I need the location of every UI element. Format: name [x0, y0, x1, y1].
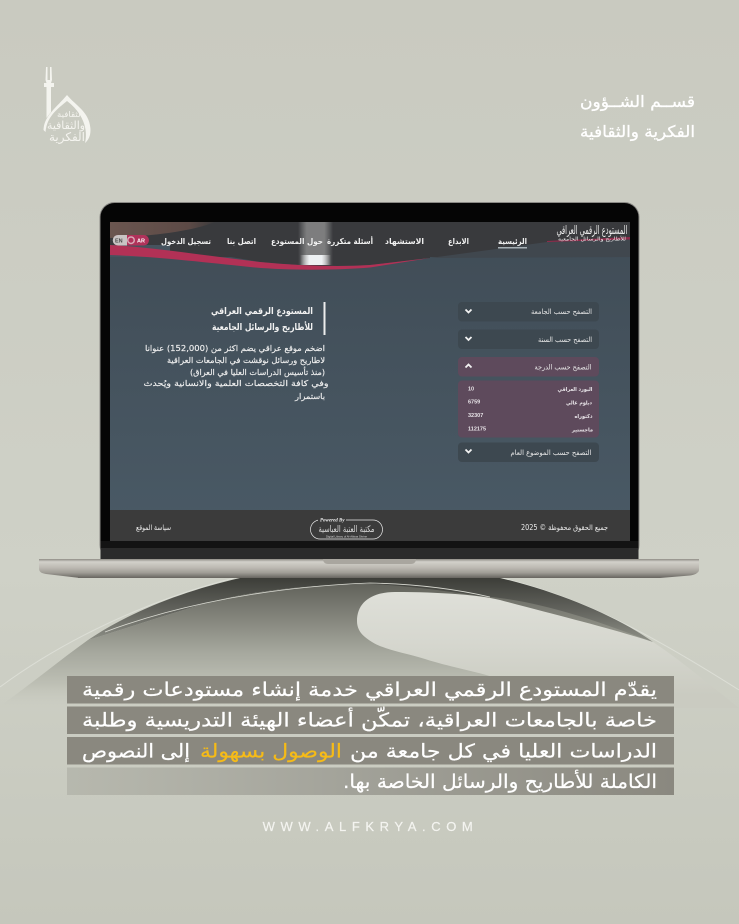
- strip line 3 with highlight: الدراسات العليا في كل جامعة من: [350, 740, 657, 762]
- heading: department name: الفكرية والثقافية: [580, 122, 695, 142]
- laptop base: [39, 559, 699, 578]
- browse accordion: [458, 302, 599, 462]
- degree list: دكتوراه: [574, 413, 593, 420]
- laptop: [39, 202, 699, 578]
- privacy link: سياسة الموقع: [136, 523, 171, 532]
- intro paragraph: [144, 344, 329, 401]
- browse by subject: [458, 442, 599, 462]
- browse by degree: [458, 357, 599, 376]
- title bar: [324, 302, 326, 335]
- degree list: 10: [468, 386, 474, 392]
- website screen: [110, 222, 630, 541]
- navigation: الرئيسية: [498, 237, 527, 246]
- degree list: دبلوم عالي: [566, 400, 592, 406]
- logo: minaret and dome calligraphy: [44, 67, 90, 145]
- laptop lid: [100, 202, 640, 560]
- language toggle: EN: [115, 238, 123, 244]
- strip line 1: [67, 676, 674, 704]
- heading: department name: قســم الشــؤون: [580, 92, 695, 112]
- website url: WWW.ALFKRYA.COM: [263, 819, 478, 834]
- degree list: البورد العراقي: [558, 387, 593, 393]
- degree list: 6759: [468, 400, 480, 406]
- intro paragraph: اضخم موقع عراقي يضم اكثر من (152,000) عنوانا: [145, 344, 325, 353]
- copyright: جميع الحقوق محفوظة © 2025: [521, 523, 608, 532]
- strip line 1: يقدّم المستودع الرقمي العراقي خدمة إنشاء مستودعات رقمية: [82, 679, 657, 702]
- intro text block: [144, 302, 329, 401]
- screen header with wave: [110, 222, 630, 270]
- degree list: [458, 380, 599, 438]
- language toggle: [113, 235, 149, 246]
- strip line 3 with highlight: إلى النصوص: [82, 740, 190, 764]
- degree list: ماجستير: [571, 428, 593, 434]
- logo: minaret and dome calligraphy: والثقافية: [47, 119, 85, 132]
- browse by university: التصفح حسب الجامعة: [531, 308, 592, 316]
- degree list: 112175: [468, 426, 486, 432]
- intro paragraph: باستمرار: [294, 392, 325, 401]
- logo: minaret and dome calligraphy: الفكرية: [49, 130, 85, 145]
- logo: minaret and dome calligraphy: الثقافية: [57, 110, 83, 119]
- screen logo: [556, 223, 628, 242]
- navigation: أسئلة متكررة: [327, 236, 373, 246]
- intro title: للأطاريح والرسائل الجامعية: [212, 321, 313, 333]
- powered by logo: مكتبة العتبة العباسية: [318, 525, 375, 535]
- strip line 3 with highlight: [67, 737, 674, 764]
- powered by logo: Powered By: [320, 518, 345, 524]
- navigation: تسجيل الدخول: [161, 237, 211, 246]
- intro paragraph: (منذ تأسيس الدراسات العليا في العراق): [190, 366, 325, 377]
- dome decoration under laptop: [0, 578, 739, 708]
- heading: department name: [580, 92, 695, 142]
- navigation: حول المستودع: [271, 237, 323, 246]
- degree list: 32307: [468, 413, 483, 419]
- screen logo: المستودع الرقمي العراقي: [556, 223, 628, 238]
- navigation: [161, 236, 527, 248]
- strip line 3 with highlight: الوصول بسهولة: [200, 740, 342, 762]
- language toggle: AR: [137, 238, 145, 244]
- intro title: المستودع الرقمي العراقي: [211, 306, 313, 317]
- strip line 2: [67, 706, 674, 734]
- description text strips: [67, 676, 674, 795]
- intro paragraph: وفي كافة التخصصات العلمية والانسانية ويُحدث: [144, 379, 329, 388]
- browse by university: [458, 302, 599, 322]
- navigation: الاستشهاد: [385, 237, 424, 246]
- browse by subject: التصفح حسب الموضوع العام: [510, 449, 592, 457]
- navigation: الابداع: [448, 237, 469, 246]
- browse by year: التصفح حسب السنة: [538, 336, 592, 344]
- strip line 4: الكاملة للأطاريح والرسائل الخاصة بها.: [343, 770, 657, 793]
- intro title: [211, 306, 313, 333]
- powered by logo: Digital Library of Al-Abbas Shrine: [326, 534, 367, 538]
- screen logo: للأطاريح والرسائل الجامعية: [558, 236, 627, 242]
- strip line 4: [67, 768, 674, 795]
- navigation: اتصل بنا: [227, 237, 256, 246]
- browse by year: [458, 330, 599, 349]
- screen footer: [110, 510, 630, 541]
- strip line 2: خاصة بالجامعات العراقية، تمكّن أعضاء الهيئة التدريسية وطلبة: [82, 707, 657, 732]
- intro paragraph: لاطاريح ورسائل نوقشت في الجامعات العراقية: [167, 356, 325, 365]
- browse by degree: التصفح حسب الدرجة: [534, 364, 592, 372]
- powered by logo: [310, 517, 382, 539]
